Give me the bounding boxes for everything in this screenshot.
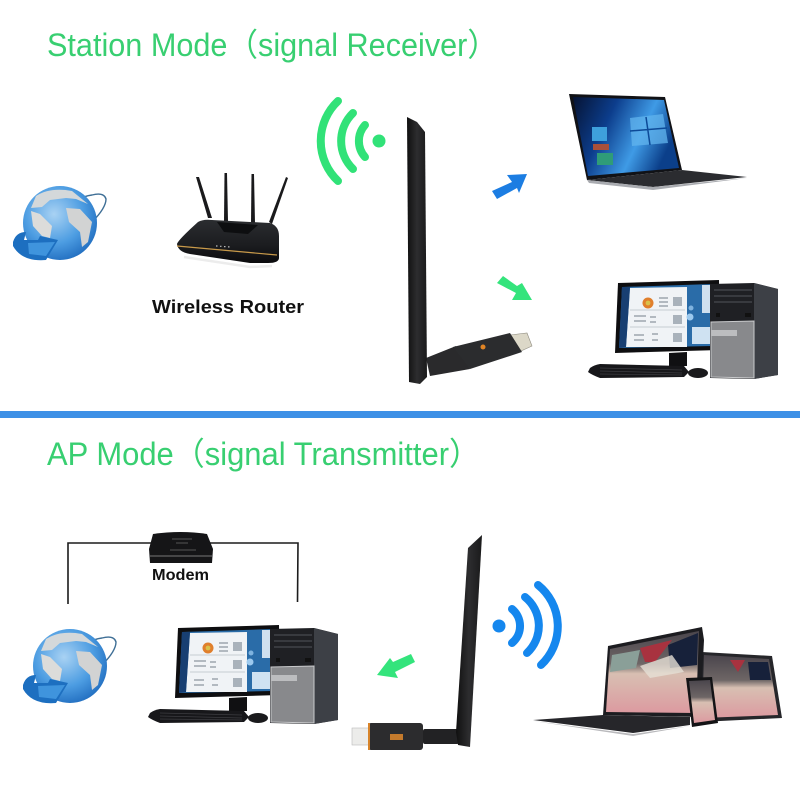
icon: desktop computer, AP mode xyxy=(148,625,338,724)
wired connection lines xyxy=(68,543,298,604)
arrow: blue to laptop xyxy=(492,174,527,199)
icon: desktop computer, station mode xyxy=(588,280,778,379)
icon: blue wifi signal xyxy=(492,585,558,665)
antenna and USB adapter, station mode xyxy=(407,117,532,384)
label: Wireless Router: Wireless Router xyxy=(152,297,304,317)
icon: internet globe, station mode xyxy=(13,186,106,260)
title: Station Mode: Station Mode（signal Receiver） xyxy=(47,27,498,63)
icon: internet globe, AP mode xyxy=(23,629,116,703)
icon: laptop xyxy=(569,94,747,190)
icon: laptop, tablet and phone xyxy=(533,627,782,736)
divider band xyxy=(0,411,800,418)
arrow: green to desktop, AP mode xyxy=(377,654,415,678)
title: AP Mode: AP Mode（signal Transmitter） xyxy=(47,436,480,472)
USB adapter and antenna, AP mode xyxy=(352,535,482,750)
icon: modem xyxy=(149,532,213,563)
label: Modem: Modem xyxy=(152,567,209,584)
icon: green wifi signal xyxy=(321,101,386,181)
icon: wireless router xyxy=(177,173,288,267)
arrow: green to desktop xyxy=(497,276,532,300)
